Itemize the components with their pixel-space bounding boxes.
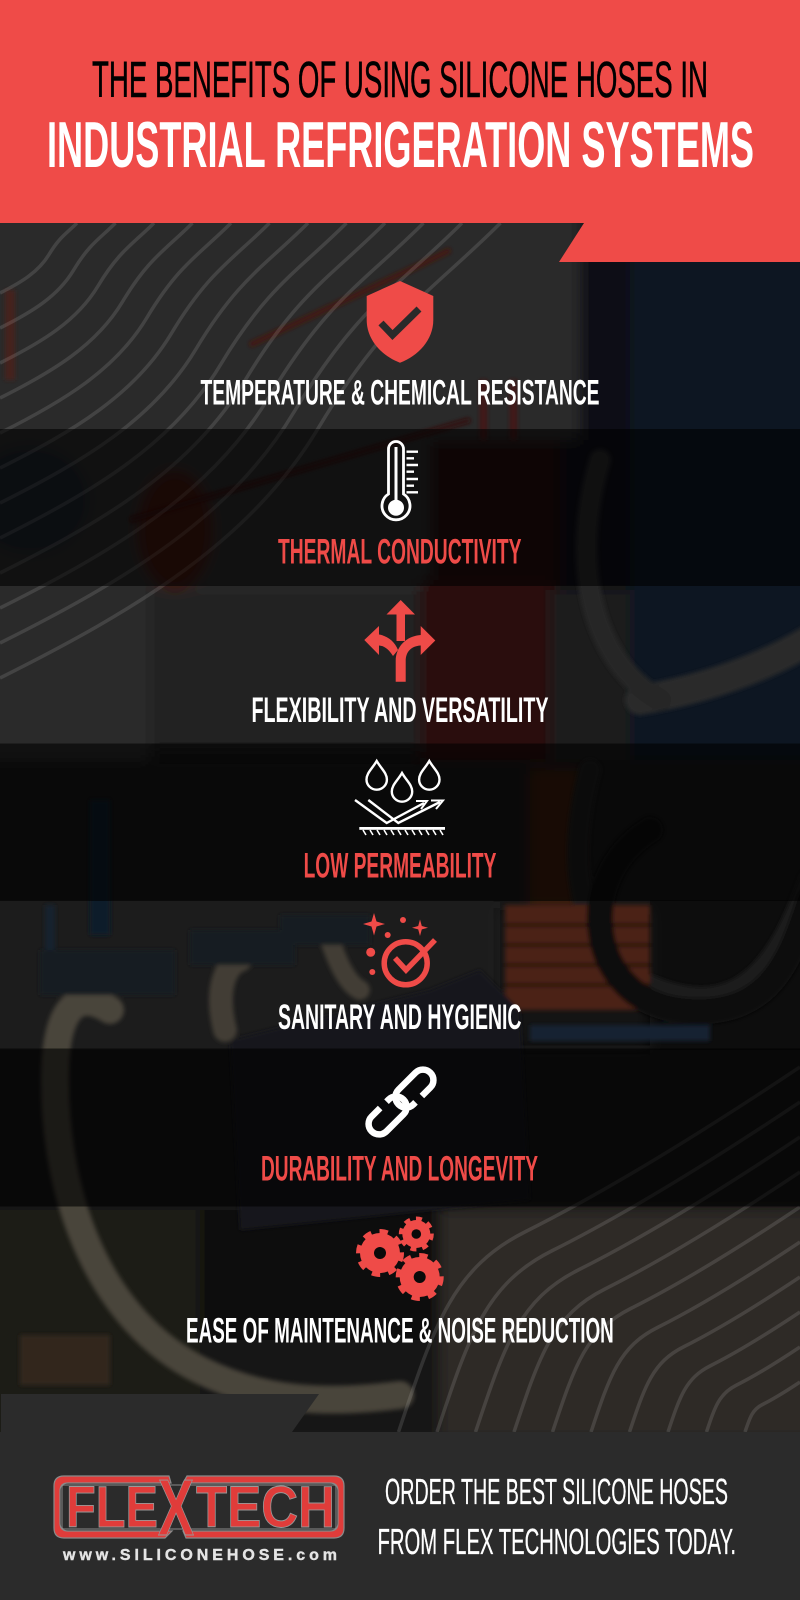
background photo: industrial machinery <box>0 200 800 1440</box>
call to action text <box>378 1471 736 1562</box>
icon: water drops on surface <box>355 761 445 835</box>
logo: Flextech <box>54 1463 344 1564</box>
icon: branching arrows <box>364 600 435 682</box>
label: sanitary: SANITARY AND HYGIENIC <box>278 998 522 1037</box>
logo: Flextech: TECH <box>196 1475 335 1540</box>
header banner <box>0 0 800 262</box>
label: flexibility: FLEXIBILITY AND VERSATILITY <box>252 691 548 730</box>
logo: Flextech: www.SILICONEHOSE.com <box>62 1547 337 1564</box>
decorative contour lines <box>0 223 800 1432</box>
label: low permeability: LOW PERMEABILITY <box>304 846 496 885</box>
icon: thermometer <box>382 442 418 520</box>
icon: sparkles and check <box>363 913 435 985</box>
label: thermal: THERMAL CONDUCTIVITY <box>278 532 522 571</box>
footer panel <box>0 1394 800 1600</box>
icon: shield with check <box>367 281 433 363</box>
icon: gears <box>359 1219 441 1298</box>
logo: Flextech: X <box>158 1463 194 1552</box>
icon: chain link <box>364 1065 438 1139</box>
dark row bands <box>0 429 800 1206</box>
title <box>47 51 754 181</box>
logo: Flextech: FLE <box>66 1475 158 1540</box>
label: durability: DURABILITY AND LONGEVITY <box>261 1150 538 1188</box>
